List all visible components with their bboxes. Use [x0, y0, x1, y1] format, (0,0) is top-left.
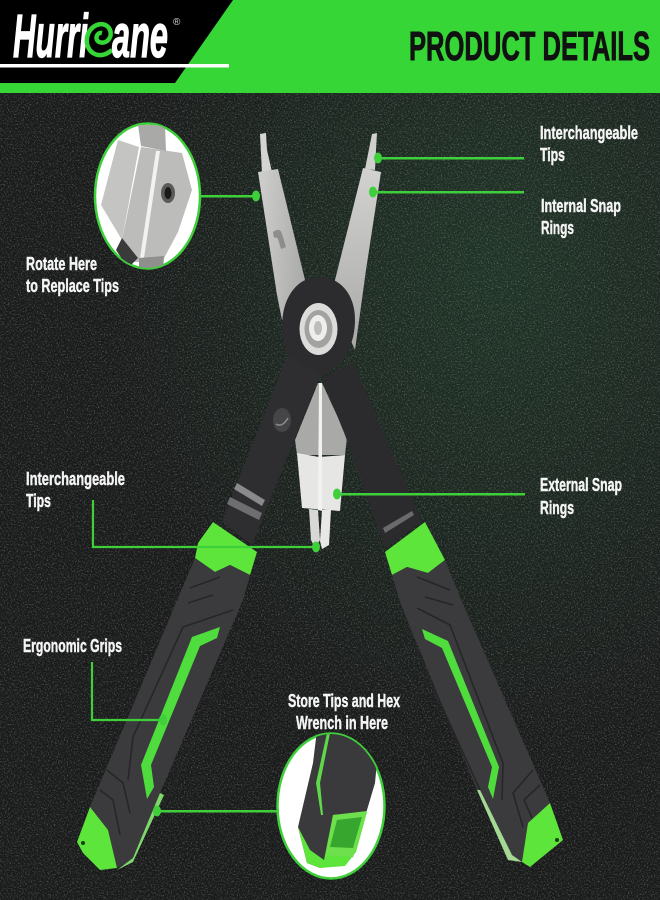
lens: rotate here detail [95, 124, 200, 270]
callout: upper interchangeable tips [374, 152, 524, 164]
label: external snap rings: External Snap [540, 474, 622, 495]
label: rotate here: to Replace Tips [26, 275, 119, 296]
logo: ® [173, 17, 181, 28]
callout: rotate here [200, 190, 260, 202]
callout: external snap rings [333, 488, 525, 500]
lower centre jaw [295, 383, 347, 549]
left black arm [222, 350, 350, 545]
logo: ane [112, 2, 168, 70]
label: storage: Store Tips and Hex [288, 690, 400, 711]
right grip stripe [422, 629, 499, 799]
white logo rule [0, 64, 229, 68]
label: storage [288, 690, 400, 733]
right grip body [392, 560, 550, 862]
header band [0, 0, 660, 93]
pliers [77, 133, 563, 870]
left grip stripe [141, 627, 220, 799]
upper left jaw [258, 133, 305, 320]
label: ergonomic grips: Ergonomic Grips [23, 635, 122, 656]
logo panel [0, 0, 233, 83]
label: internal snap rings [541, 195, 621, 238]
label: interchangeable tips lower: Interchangeable [26, 468, 125, 489]
callout: storage [153, 806, 277, 816]
label: interchangeable tips lower [26, 468, 125, 511]
upper right jaw [335, 133, 381, 350]
label: interchangeable tips lower: Tips [26, 490, 51, 511]
callout: internal snap rings [369, 186, 524, 198]
rivet [273, 408, 291, 432]
callout: ergonomic grips [92, 662, 167, 726]
left grip body [90, 558, 250, 868]
label: interchangeable tips upper [540, 122, 638, 165]
pivot disc [282, 277, 355, 376]
right collar [385, 522, 445, 575]
callout: lower interchangeable tips [93, 500, 320, 552]
right black arm [322, 362, 422, 548]
label: internal snap rings: Rings [541, 217, 574, 238]
label: interchangeable tips upper: Tips [540, 144, 565, 165]
label: external snap rings: Rings [540, 497, 574, 518]
right grip contours [405, 577, 540, 827]
lower tips [309, 509, 331, 549]
label: rotate here: Rotate Here [26, 253, 97, 274]
label: internal snap rings: Internal Snap [541, 195, 621, 216]
left collar [195, 522, 257, 575]
label: external snap rings [540, 474, 622, 518]
right end cap [522, 803, 563, 867]
logo: Hurri [13, 2, 89, 70]
icon: swirl [87, 24, 112, 55]
label: storage: Wrench in Here [296, 712, 388, 733]
label: rotate here [26, 253, 119, 296]
left grip contours [100, 577, 243, 835]
lens: storage compartment detail [278, 730, 384, 878]
left end cap [77, 807, 117, 870]
pivot washer [300, 303, 338, 355]
